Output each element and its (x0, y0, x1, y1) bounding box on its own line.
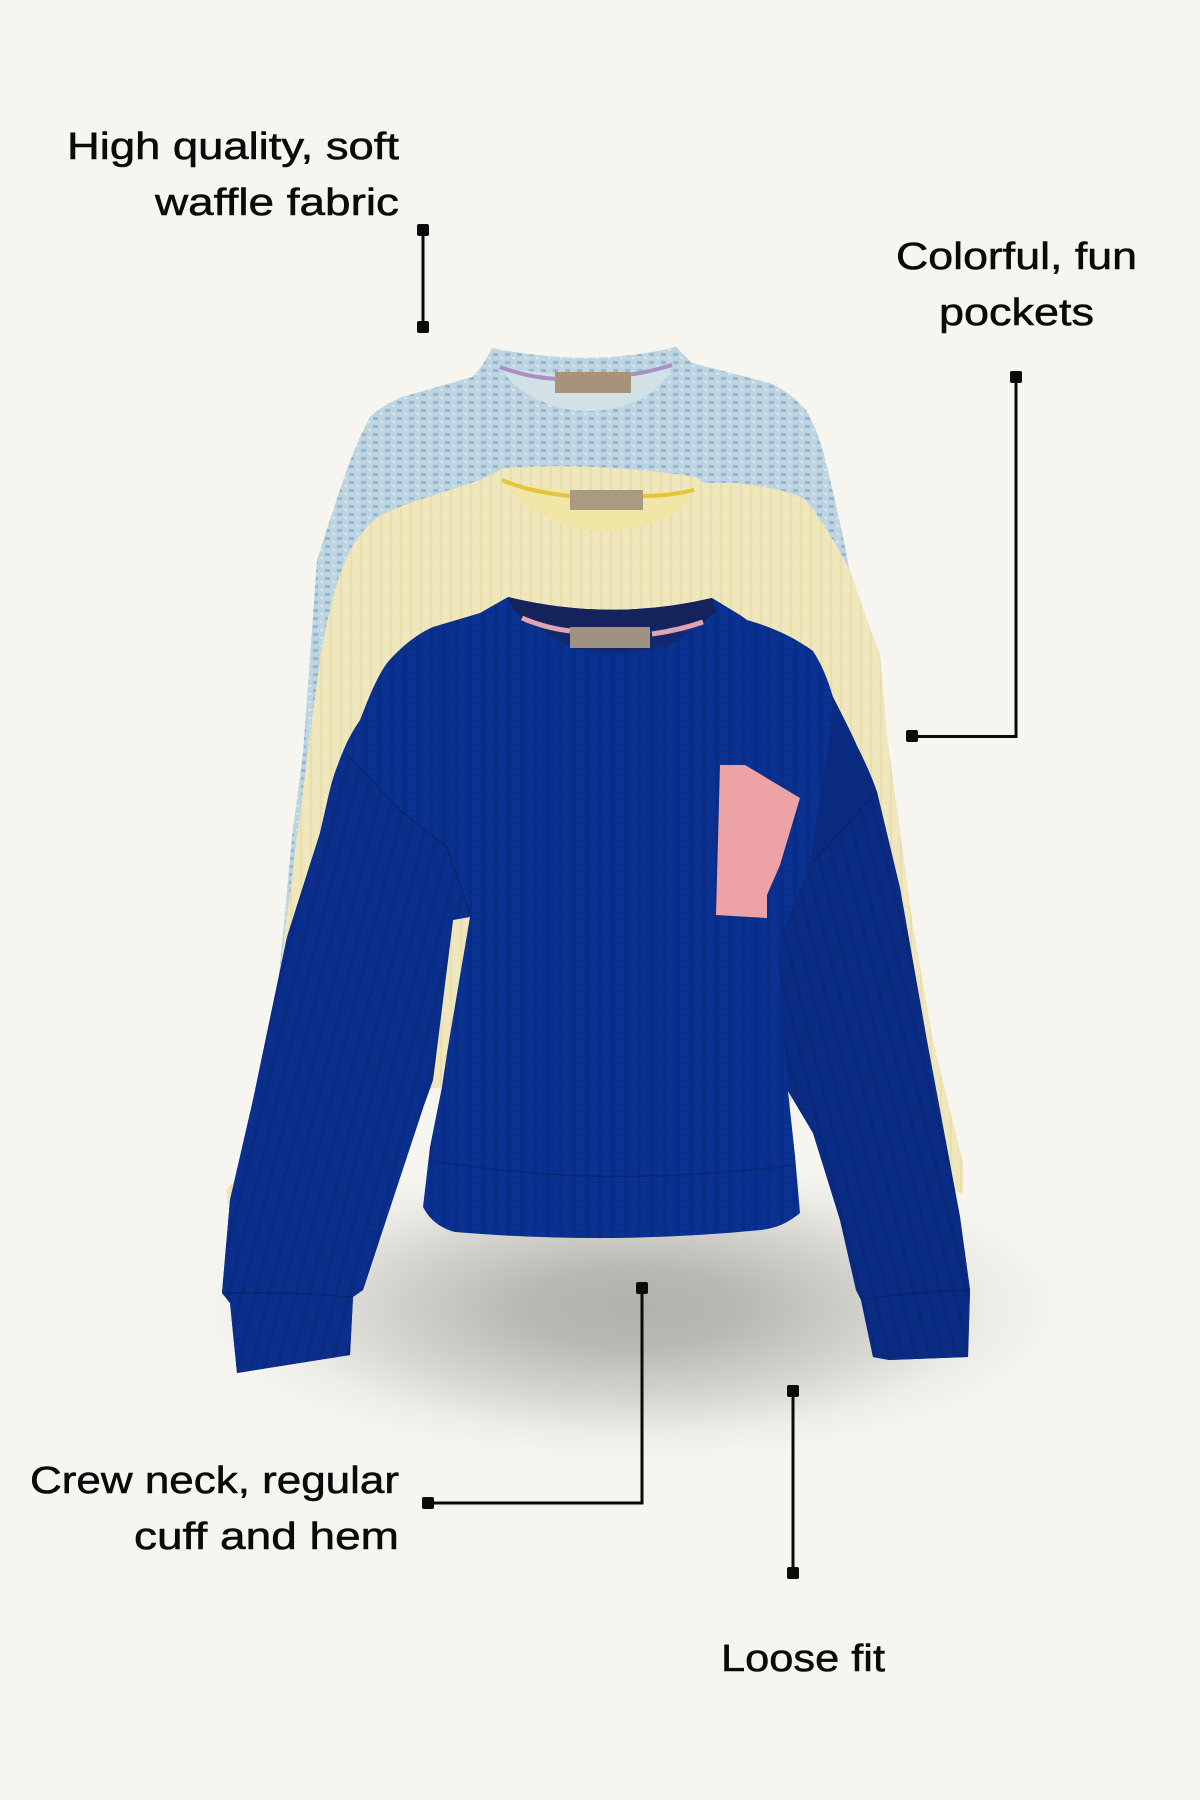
yellow neck tag (570, 490, 643, 510)
pockets label: pockets (939, 292, 1094, 334)
light blue piping (500, 365, 672, 379)
seams: shoulder, cuffs and hem (222, 752, 970, 1300)
pink piping (522, 618, 703, 634)
yellow piping (502, 480, 694, 496)
pockets connector (906, 371, 1022, 742)
drop shadow under sweaters (192, 1153, 1072, 1463)
fabric label: waffle fabric (154, 182, 399, 224)
navy collar back (508, 597, 716, 630)
pockets label: Colorful, fun (896, 236, 1137, 278)
navy right shoulder cap (810, 697, 877, 865)
neck label: cuff and hem (134, 1516, 399, 1558)
pockets label (896, 236, 1137, 334)
light blue neck opening (500, 364, 672, 411)
callout: fit (721, 1385, 885, 1680)
sweater: light blue (back) (278, 347, 860, 987)
navy neck tag (570, 627, 650, 648)
fabric connector (417, 224, 429, 333)
sweater: navy (front) (222, 597, 970, 1373)
fit label: Loose fit (721, 1638, 885, 1680)
sweater: yellow (middle) (226, 466, 963, 1205)
neck connector (422, 1282, 648, 1509)
callout: pockets (896, 236, 1137, 742)
pink pocket (716, 765, 800, 918)
navy right sleeve (777, 792, 970, 1360)
light blue neck tag (555, 372, 631, 393)
yellow neck opening (502, 480, 694, 532)
fabric label: High quality, soft (67, 126, 400, 168)
neck label: Crew neck, regular (30, 1460, 399, 1502)
navy left sleeve (222, 752, 470, 1373)
navy neck opening (540, 628, 690, 653)
neck label (30, 1460, 399, 1558)
callout: neck, cuff and hem (30, 1282, 648, 1558)
fabric label (67, 126, 400, 224)
fit connector (787, 1385, 799, 1579)
callout: fabric (67, 126, 429, 333)
